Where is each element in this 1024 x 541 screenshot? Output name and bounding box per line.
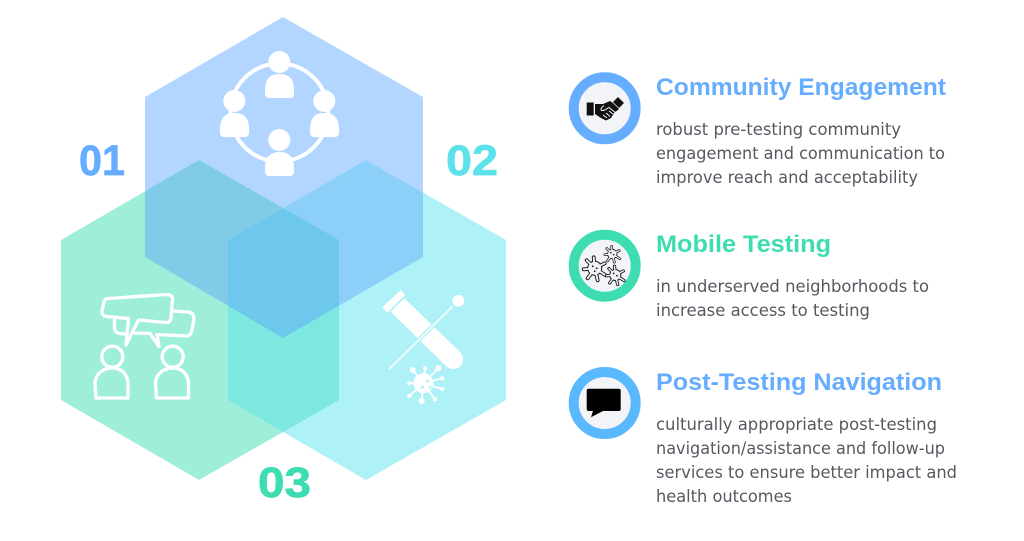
icon: speech bubble badge: [574, 372, 636, 434]
number 02: 02: [446, 137, 498, 185]
text: community engagement description: engagement and communication to: [656, 144, 945, 164]
icon: handshake badge: [574, 77, 636, 139]
heading: Mobile Testing: Mobile Testing: [656, 231, 831, 258]
heading: Community Engagement: Community Engagement: [656, 74, 946, 101]
text: post-testing navigation description: [656, 415, 957, 507]
text: mobile testing description: increase access to testing: [656, 301, 870, 321]
text: mobile testing description: [656, 277, 929, 321]
text: post-testing navigation description: health outcomes: [656, 487, 792, 507]
number 03: 03: [258, 459, 311, 507]
text: community engagement description: robust pre-testing community: [656, 120, 901, 140]
icon: people in a circle: [220, 51, 339, 176]
icon: two people talking: [95, 294, 194, 398]
text: post-testing navigation description: navigation/assistance and follow-up: [656, 439, 945, 459]
heading: Post-Testing Navigation: Post-Testing Navigation: [656, 369, 942, 396]
text: post-testing navigation description: services to ensure better impact and: [656, 463, 957, 483]
text: community engagement description: improve reach and acceptability: [656, 168, 918, 188]
text: mobile testing description: in underserved neighborhoods to: [656, 277, 929, 297]
text: community engagement description: [656, 120, 945, 188]
panel: overlapping hexagons: [61, 17, 506, 480]
number 01: 01: [79, 137, 125, 185]
icon: test tube, swab and virus: [382, 290, 464, 404]
text: post-testing navigation description: culturally appropriate post-testing: [656, 415, 937, 435]
icon: viruses badge: [574, 235, 636, 297]
